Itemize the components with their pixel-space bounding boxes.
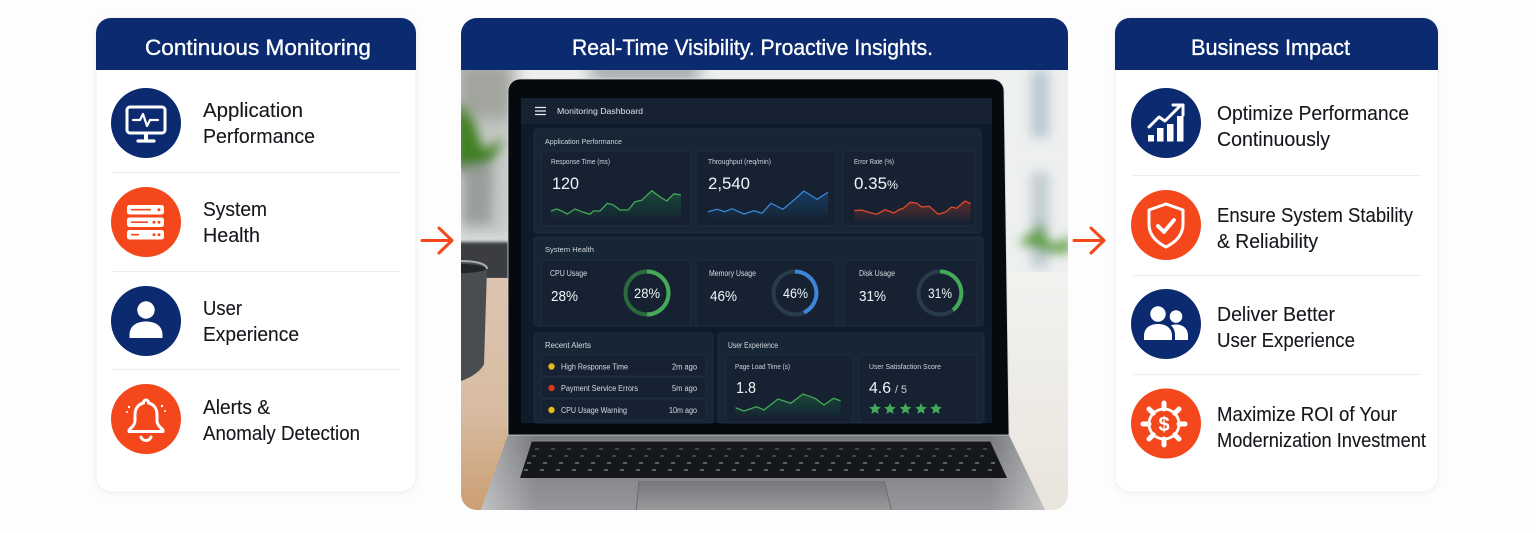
heading: real-time visibility [461, 18, 1068, 70]
panel: business impact [1115, 18, 1438, 492]
text: application performance: Application [203, 99, 303, 122]
icon: users [1131, 289, 1201, 359]
card: cpu usage: 28% [551, 288, 578, 305]
text: optimize performance [1217, 102, 1409, 151]
section: application performance [534, 129, 981, 233]
text: user experience: Experience [203, 323, 299, 346]
card: error rate: 0.35 [854, 174, 887, 193]
card: disk usage: Disk Usage [859, 269, 895, 278]
section: recent alerts: CPU Usage Warning [561, 406, 627, 415]
text: system health: Health [203, 224, 260, 247]
text: application performance [203, 99, 315, 148]
section: recent alerts: 5m ago [672, 384, 698, 393]
text: alerts and anomaly detection [203, 396, 360, 445]
card: disk usage: 31% [859, 288, 886, 305]
heading: business impact: Business Impact [1191, 35, 1350, 60]
heading: continuous monitoring [96, 18, 416, 70]
icon: user [111, 286, 181, 356]
icon: alert bell [111, 384, 181, 454]
card: cpu usage: 28% [634, 285, 660, 301]
card: user satisfaction score [859, 355, 977, 423]
text: alerts and anomaly detection: Alerts & [203, 396, 270, 419]
card: throughput: 2,540 [708, 174, 750, 193]
dashboard title bar: Monitoring Dashboard [557, 106, 643, 116]
card: page load time: Page Load Time (s) [735, 362, 790, 371]
section: recent alerts: Recent Alerts [545, 341, 591, 350]
heading: business impact [1115, 18, 1438, 70]
card: user satisfaction score: / 5 [895, 384, 907, 396]
table surface [461, 272, 1068, 518]
section: recent alerts: 2m ago [672, 362, 698, 372]
laptop base and keyboard [480, 435, 1046, 512]
card: cpu usage: CPU Usage [550, 269, 587, 278]
icon: application performance monitor [111, 88, 181, 158]
icon: gear with dollar [1131, 388, 1201, 458]
text: user experience: User [203, 297, 242, 320]
card: response time [541, 151, 691, 226]
section: user experience [718, 333, 984, 423]
arrow: dashboard to business impact [1074, 228, 1104, 253]
card: throughput [696, 151, 836, 226]
panel: real-time visibility [455, 18, 1070, 520]
section: user experience: User Experience [728, 341, 778, 350]
arrow: monitoring to dashboard [422, 228, 452, 253]
card: error rate: % [887, 178, 898, 192]
laptop photo [455, 60, 1070, 520]
card: disk usage: 31% [928, 285, 952, 301]
laptop screen bezel [508, 79, 1009, 435]
heading: real-time visibility: Real-Time Visibility. Proactive Insights. [572, 35, 933, 60]
section: recent alerts: 10m ago [669, 406, 697, 415]
icon: system health servers [111, 187, 181, 257]
icon: growth chart [1131, 88, 1201, 158]
mug [461, 260, 487, 381]
panel: continuous monitoring [96, 18, 416, 492]
text: ensure system stability: Ensure System Stability [1217, 204, 1414, 227]
text: maximize roi: Modernization Investment [1217, 429, 1426, 452]
text: deliver better user experience: User Experience [1217, 329, 1355, 352]
section: recent alerts: High Response Time [561, 362, 628, 372]
card: page load time [726, 355, 853, 423]
card: cpu usage [541, 260, 691, 326]
heading: continuous monitoring: Continuous Monitoring [145, 35, 371, 60]
card: memory usage: 46% [783, 285, 808, 301]
text: optimize performance: Continuously [1217, 128, 1331, 151]
section: recent alerts [534, 333, 713, 423]
text: maximize roi [1217, 403, 1426, 452]
section: application performance: Application Performance [545, 137, 622, 146]
text: ensure system stability [1217, 204, 1414, 253]
text: optimize performance: Optimize Performance [1217, 102, 1409, 125]
section: recent alerts: Payment Service Errors [561, 384, 638, 393]
text: system health [203, 198, 267, 247]
card: memory usage: Memory Usage [709, 269, 756, 278]
card: disk usage [844, 260, 977, 326]
section: system health [534, 237, 983, 326]
card: error rate [843, 151, 975, 226]
card: response time: Response Time (ms) [551, 157, 610, 166]
card: user satisfaction score: 4.6 [869, 380, 891, 397]
text: alerts and anomaly detection: Anomaly Detection [203, 422, 360, 445]
monitoring dashboard screen [521, 98, 992, 423]
card: response time: 120 [552, 174, 579, 193]
card: error rate: Error Rate (%) [854, 157, 894, 166]
text: system health: System [203, 198, 267, 221]
icon: gear with dollar: $ [1158, 414, 1170, 436]
text: maximize roi: Maximize ROI of Your [1217, 403, 1397, 426]
card: user satisfaction score: User Satisfaction Score [869, 362, 941, 371]
card: page load time: 1.8 [736, 380, 756, 397]
section: system health: System Health [545, 245, 594, 254]
card: throughput: Throughput (req/min) [708, 157, 771, 166]
text: deliver better user experience [1217, 303, 1355, 352]
dashboard title bar [521, 98, 992, 124]
text: application performance: Performance [203, 125, 315, 148]
rating stars [869, 403, 942, 414]
card: memory usage: 46% [710, 288, 737, 305]
icon: shield check [1131, 190, 1201, 260]
text: user experience [203, 297, 299, 346]
text: deliver better user experience: Deliver Better [1217, 303, 1335, 326]
text: ensure system stability: & Reliability [1217, 230, 1319, 253]
card: memory usage [696, 260, 836, 326]
